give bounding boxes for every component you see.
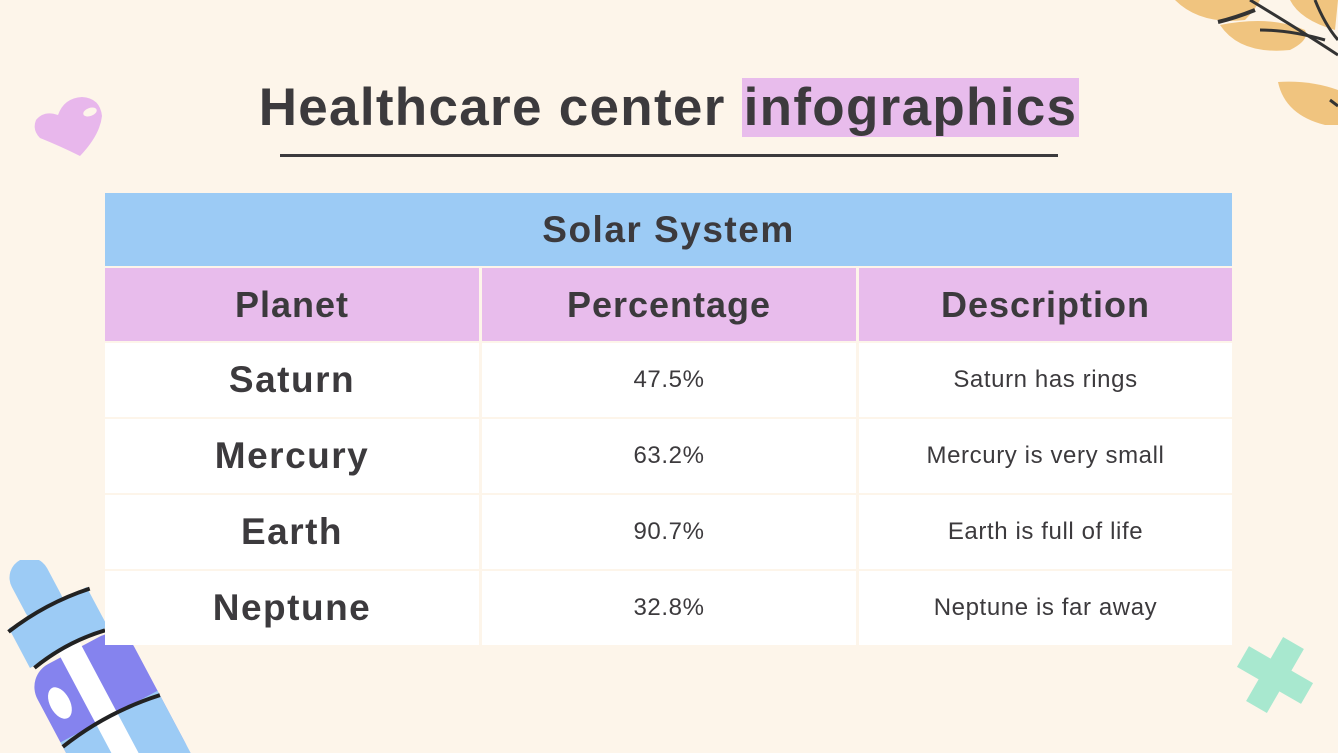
- icon: leaves top right: [1175, 0, 1338, 125]
- row: Mercury: Mercury: [215, 435, 369, 476]
- row: Earth: Earth is full of life: [948, 518, 1143, 545]
- column headers: Percentage: [567, 284, 771, 324]
- icon: dropper bottle: [7, 560, 191, 753]
- row: Neptune: Neptune: [213, 587, 371, 628]
- row: Saturn: [105, 343, 1232, 417]
- row: Saturn: Saturn has rings: [953, 366, 1138, 393]
- table header: Solar System: Solar System: [542, 208, 795, 250]
- row: Mercury: [105, 419, 1232, 493]
- row: Neptune: [105, 571, 1232, 645]
- table: [105, 193, 1232, 645]
- row: Neptune: Neptune is far away: [934, 594, 1157, 621]
- table header: Solar System: [105, 193, 1232, 266]
- icon: medical cross: [1237, 637, 1313, 713]
- row: Mercury: Mercury is very small: [927, 442, 1164, 469]
- row: Earth: 90.7%: [633, 518, 705, 545]
- row: Saturn: Saturn: [229, 359, 355, 400]
- row: Saturn: 47.5%: [633, 366, 705, 393]
- title: Healthcare center infographics: [259, 78, 1077, 137]
- row: Mercury: 63.2%: [633, 442, 705, 469]
- icon: heart: [34, 97, 102, 156]
- column headers: [105, 268, 1232, 341]
- row: Earth: Earth: [241, 511, 343, 552]
- row: Neptune: 32.8%: [633, 594, 705, 621]
- row: Earth: [105, 495, 1232, 569]
- column headers: Description: [941, 284, 1150, 324]
- column headers: Planet: [235, 284, 349, 324]
